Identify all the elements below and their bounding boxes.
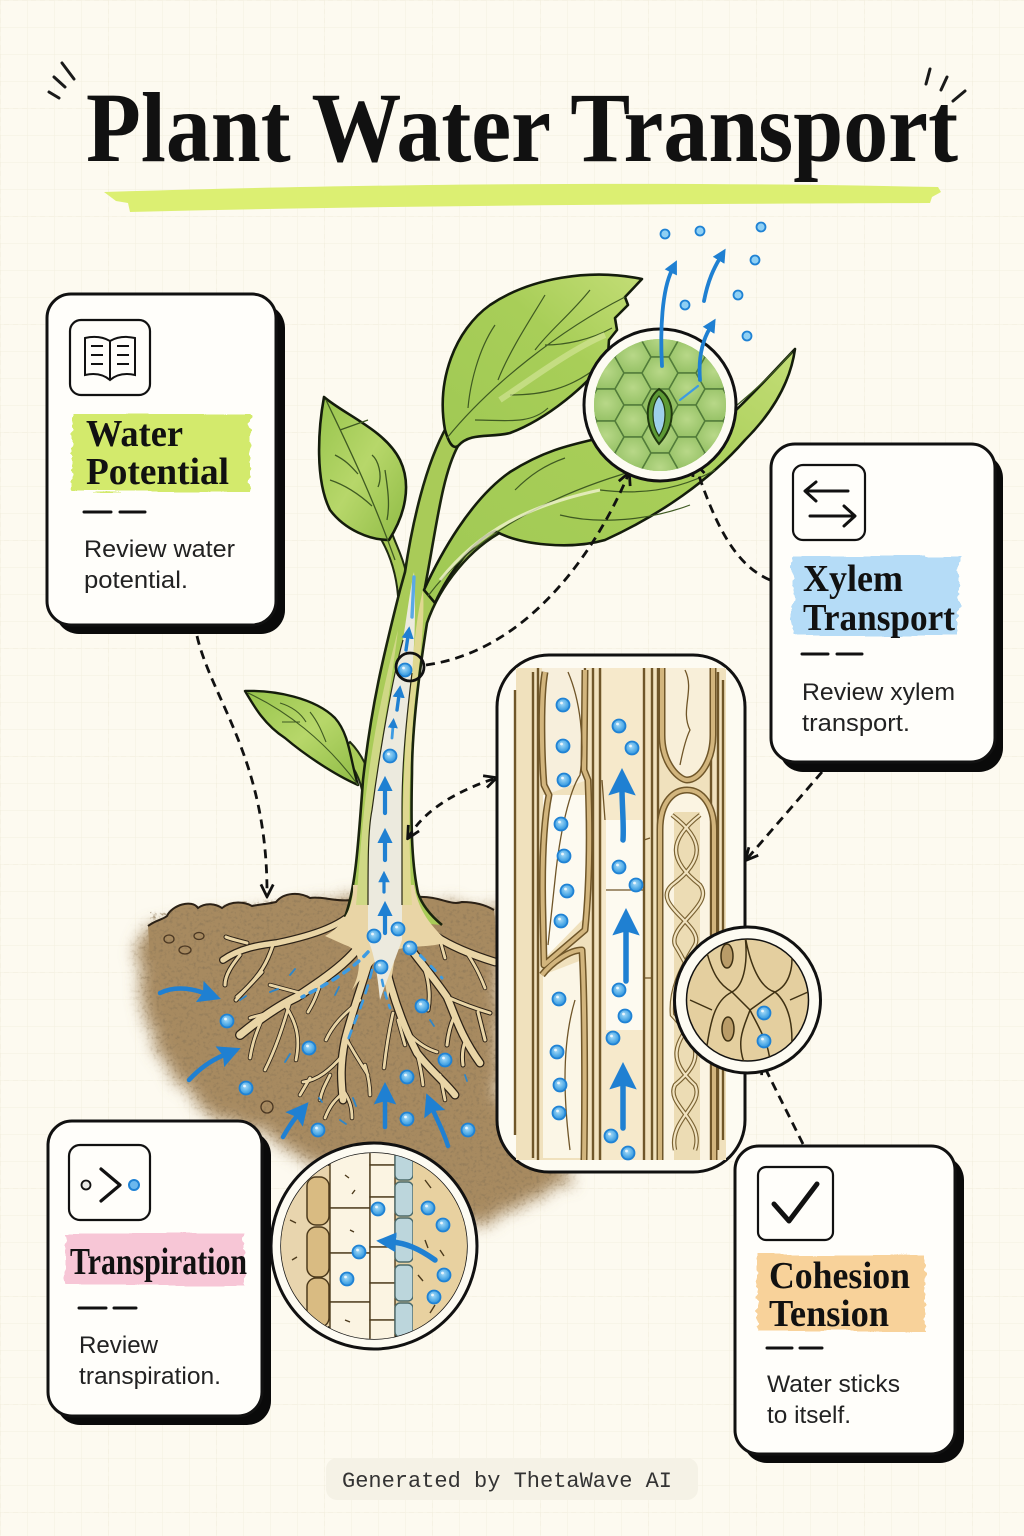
body text [767,1371,900,1429]
decorative sparks left of title [49,63,74,98]
panel: tissue cell magnifier [674,927,820,1073]
heading: water potential [86,413,229,493]
heading: transpiration: Transpiration [70,1241,247,1283]
connector: xylem card to stoma [695,464,770,580]
body text: potential. [84,567,188,594]
heading: water potential: Potential [86,451,229,493]
helix highlight [667,815,703,1150]
connector: stem to stoma [426,473,629,665]
card: water potential [47,294,285,634]
card: transpiration [48,1121,271,1425]
top leaf [443,275,642,447]
left leaf [319,397,406,560]
pale xylem channel [368,572,415,1000]
xylem water drops [550,698,642,1160]
card: cohesion tension [735,1146,964,1463]
helix [667,815,703,1150]
right long leaf [424,349,795,603]
footer badge: Generated by ThetaWave AI [342,1469,672,1494]
stomatal pore [648,389,672,444]
body text: Review xylem [802,679,955,706]
connector: cohesion card to cell circle [762,1062,803,1144]
highlight: pink [66,1233,244,1285]
icon: chevron with two dots [69,1145,150,1220]
soil mound [125,885,595,1245]
body text [79,1332,221,1390]
body text [84,536,235,594]
yellow strips beside channel [402,590,423,905]
heading: cohesion tension: Tension [769,1293,889,1335]
stem and branches [325,426,505,1000]
heading: cohesion tension [769,1255,910,1335]
connector: xylem card to xylem panel [746,772,822,860]
footer badge [326,1458,698,1500]
icon: two-way arrows [793,465,865,540]
title underline brush stroke [104,184,941,212]
stem focus ring [396,653,424,681]
highlight: orange [757,1255,925,1331]
divider dashes [802,652,862,656]
body text [802,679,955,737]
icon: open book [70,320,150,395]
divider dashes [84,510,145,514]
vapour arrows and drops [660,222,766,400]
highlight: blue [793,556,959,636]
panel: root cell magnifier [271,1143,477,1350]
roots [223,905,495,1118]
body text: transpiration. [79,1363,221,1390]
dark root outlines [223,905,495,1118]
body text: transport. [802,710,910,737]
icon: check mark [758,1167,833,1240]
connector: stem to xylem panel [408,778,496,838]
heading: xylem transport [803,558,955,639]
divider dashes [767,1346,822,1350]
heading: xylem transport: Xylem [803,558,903,600]
body text: Review water [84,536,235,563]
connector: water potential card to soil [197,636,267,896]
heading: xylem transport: Transport [803,597,955,639]
trunk [345,426,505,925]
small lower leaf [245,691,358,785]
root crown [325,885,448,1000]
tan root fill [223,905,495,1118]
blue arrows and drops in stem [384,577,414,933]
heading: water potential: Water [86,413,183,455]
soil water drops [220,922,474,1136]
highlight: green [72,414,250,492]
small leaf petiole [340,742,368,790]
left vessel cells [542,668,587,795]
xylem arrows [622,790,626,1128]
panel: xylem magnified [497,655,745,1172]
blue water in roots [240,945,467,1124]
body text: Water sticks [767,1371,900,1398]
inflow arrows in soil [160,988,448,1146]
decorative sparks right of title [926,69,965,101]
body text: to itself. [767,1402,851,1429]
divider dashes [79,1306,136,1310]
panel: stoma magnifier [584,325,736,485]
wall lines [515,668,723,1160]
right cells [662,668,712,778]
body text: Review [79,1332,159,1359]
heading: cohesion tension: Cohesion [769,1255,910,1297]
left leaf petiole [378,533,406,596]
card: xylem transport [771,444,1003,772]
center channel [602,668,644,1160]
